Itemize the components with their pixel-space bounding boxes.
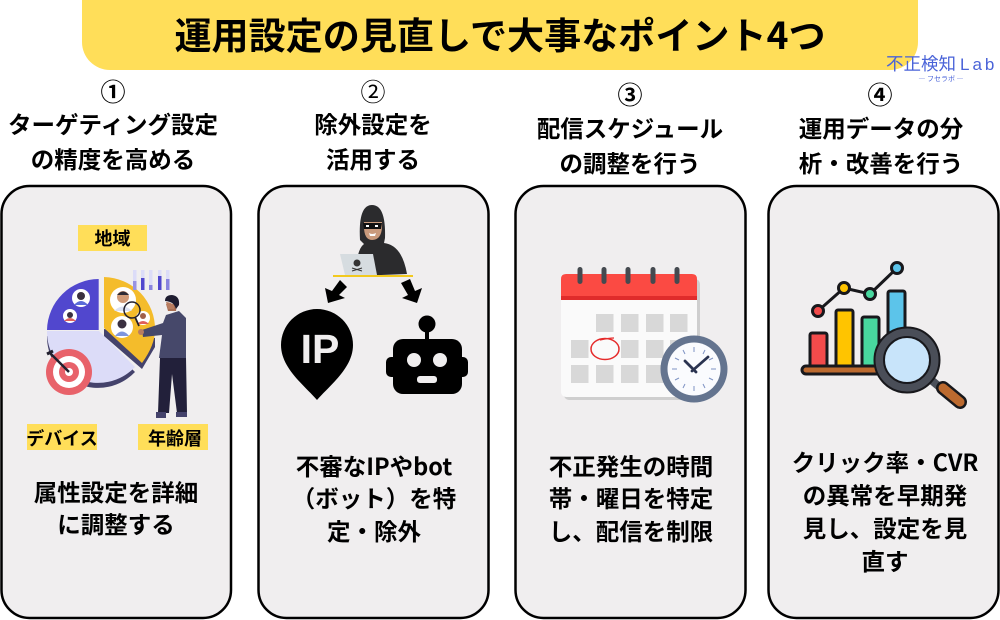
clock	[660, 336, 728, 402]
card 4	[768, 186, 998, 618]
title banner	[82, 0, 918, 70]
icon: IP location pin: IP	[301, 326, 339, 372]
body text 4: 直す	[862, 543, 908, 577]
body text 4: クリック率・CVR	[792, 444, 978, 478]
heading 3	[537, 110, 723, 179]
number 2: ②	[360, 73, 386, 109]
body text 2: 不審なIPやbot	[296, 448, 452, 482]
panel 3: schedule	[516, 76, 746, 618]
label: region: 地域	[94, 225, 130, 251]
body text 2	[292, 448, 456, 547]
heading 4: 析・改善を行う	[799, 145, 963, 179]
heading 1	[8, 106, 218, 175]
card 3	[516, 186, 746, 618]
arrow: right	[401, 279, 422, 303]
logo: 不正検知Lab	[886, 51, 997, 84]
body text 4	[792, 444, 978, 577]
label: age: 年齢層	[148, 425, 202, 451]
title banner: 運用設定の見直しで大事なポイント4つ	[174, 6, 826, 60]
logo: 不正検知Lab: Lab	[960, 55, 997, 74]
heading 4	[799, 110, 964, 179]
heading 2: 除外設定を	[314, 106, 432, 140]
number 4: ④	[867, 76, 893, 112]
panel 4: analysis	[768, 76, 998, 618]
body text 2: （ボット）を特	[292, 480, 456, 514]
card 2	[258, 186, 488, 618]
number 1: ①	[100, 73, 126, 109]
body text 1	[34, 474, 198, 540]
icon: bar chart with magnifier	[802, 262, 960, 402]
label: region	[78, 225, 147, 251]
heading 1: ターゲティング設定	[8, 106, 218, 140]
body text 3: 不正発生の時間	[549, 448, 713, 482]
label: device: デバイス	[26, 425, 98, 451]
heading 3: の調整を行う	[560, 145, 700, 179]
heading 4: 運用データの分	[799, 110, 964, 144]
body text 4: 見し、設定を見	[803, 510, 967, 544]
logo: 不正検知Lab: ― フセラボ ―	[918, 74, 964, 84]
heading 3: 配信スケジュール	[537, 110, 723, 144]
icon: hacker	[333, 205, 413, 277]
magnifier	[124, 302, 140, 318]
body text 3: し、配信を制限	[549, 513, 713, 547]
body text 1: に調整する	[57, 506, 175, 540]
body text 4: の異常を早期発	[803, 477, 968, 511]
number 3: ③	[617, 76, 643, 112]
panel 1: targeting	[2, 73, 231, 618]
panel 2: exclusions	[258, 73, 488, 618]
small bars	[133, 270, 170, 290]
body text 3: 帯・曜日を特定	[549, 480, 713, 514]
analyst	[166, 304, 177, 311]
heading 2	[314, 106, 432, 175]
body text 3	[549, 448, 713, 547]
logo: 不正検知Lab: 不正検知	[886, 51, 956, 76]
body text 1: 属性設定を詳細	[34, 474, 198, 508]
illustration: pie chart and analyst	[46, 270, 187, 418]
avatars	[72, 289, 90, 307]
heading 1: の精度を高める	[31, 141, 195, 175]
icon: IP location pin	[281, 309, 353, 400]
target	[46, 349, 92, 395]
icon: calendar with clock	[561, 267, 728, 402]
body text 2: 定・除外	[327, 513, 421, 547]
icon: robot	[386, 316, 468, 394]
card 1	[2, 186, 231, 618]
heading 2: 活用する	[326, 141, 420, 175]
arrow: left	[325, 280, 347, 303]
